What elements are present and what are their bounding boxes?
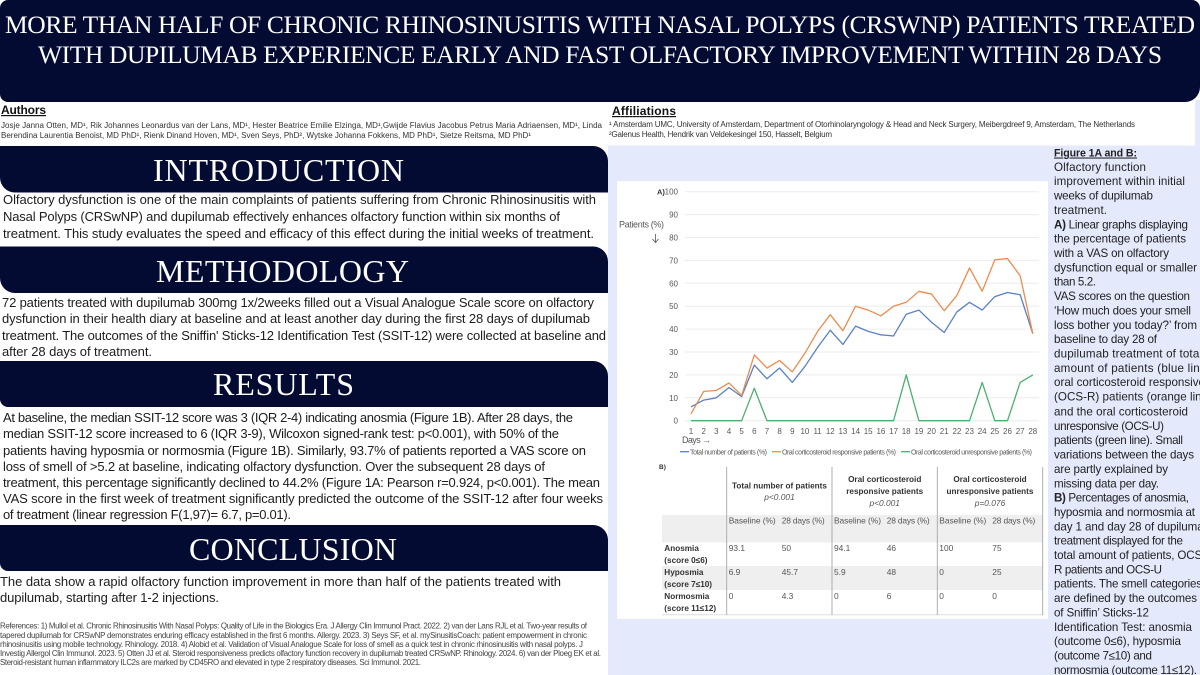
table column headers: responsive patients: [846, 487, 924, 496]
figure caption: and the oral corticosteroid: [1054, 406, 1188, 418]
table row: normosmia: Normosmia: [664, 592, 710, 601]
line chart: figure 1A: [619, 188, 1039, 456]
text: conclusion body: [0, 574, 561, 605]
table column headers: p<0.001: [763, 492, 795, 502]
figure caption: patients (green line). Small: [1054, 434, 1183, 447]
table column headers: [732, 475, 1034, 508]
panel: introduction: [0, 146, 608, 241]
text: methodology body: 72 patients treated with dupilumab 300mg 1x/2weeks filled out a Visual Analogue Scale score on olfactory: [2, 295, 594, 310]
figure caption: improvement within initial: [1054, 175, 1185, 188]
text: results body: treatment, this percentage significantly declined to 44.2% (Figure 1A: Pearson r=0.924, p<0.001). The mean: [3, 475, 600, 490]
x axis labels: 17: [889, 427, 899, 436]
title banner: MORE THAN HALF OF CHRONIC RHINOSINUSITIS WITH NASAL POLYPS (CRSWNP) PATIENTS TREATED: [5, 10, 1195, 39]
references: Investig Allergol Clin Immunol. 2023. 5) Otten JJ et al. Steroid responsiveness predicts olfactory function recovery in dupilumab treated CRSwNP. Rhinology. 2024. 6) van der Ploeg EK et al.: [0, 649, 601, 658]
text: introduction body: treatment. This study evaluates the speed and efficacy of this effect during the initial weeks of treatment.: [3, 226, 594, 241]
table sub headers: 28 days (%): [992, 516, 1036, 526]
authors: Berendina Laurentia Benoist, MD PhD¹, Rienk Dinand Hoven, MD¹, Sven Seys, PhD², Wytske Johanna Fokkens, MD PhD¹, Sietze Reitsma, MD PhD¹: [1, 131, 531, 140]
heading: introduction: [0, 146, 608, 192]
heading: methodology: [0, 246, 608, 293]
table row: hyposmia: [664, 567, 1002, 589]
text: introduction body: [3, 192, 596, 241]
figure caption: hyposmia and normosmia at: [1054, 506, 1196, 519]
table sub headers: Baseline (%): [729, 516, 776, 526]
table row: hyposmia: 0: [939, 567, 944, 577]
table label B: B): [659, 464, 666, 471]
x axis labels: 24: [978, 427, 987, 436]
table sub headers: Baseline (%): [834, 516, 881, 526]
figure caption: variations between the days: [1054, 449, 1194, 462]
gridlines and y axis: 10: [669, 394, 679, 403]
references: rhinosinusitis using mobile technology. Rhinology. 2018. 4) Alobid et al. Validation of Visual Analogue Scale for loss of smell as a quick test in chronic rhinosinusitis with nasal polyps. J: [0, 640, 583, 649]
gridlines and y axis: 60: [669, 279, 679, 288]
text: results body: [3, 410, 604, 522]
figure caption: [1053, 148, 1200, 675]
text: results body: At baseline, the median SSIT-12 score was 3 (IQR 2-4) indicating anosmia (Figure 1B). After 28 days, the: [3, 410, 573, 425]
gridlines and y axis: 80: [669, 234, 679, 242]
legend: Oral corticosteroid unresponsive patients (%): [911, 449, 1032, 456]
figure caption: unresponsive (OCS-U): [1054, 420, 1164, 433]
x axis labels: 27: [1016, 427, 1025, 436]
x axis labels: 26: [1003, 427, 1012, 436]
figure caption: are partly explained by: [1054, 463, 1168, 476]
y axis title: Patients (%): [619, 220, 664, 230]
title banner: [0, 0, 1200, 102]
legend: Total number of patients (%): [690, 449, 767, 456]
table column headers: Oral corticosteroid: [953, 475, 1027, 484]
table row: normosmia: 0: [939, 591, 944, 601]
text: results body: of treatment (linear regression F(1,97)= 6.7, p=0.01).: [3, 507, 291, 522]
figure caption: (outcome 0≤6), hyposmia: [1054, 635, 1182, 648]
references: Steroid-resistant human inflammatory ILC2s are marked by CD45RO and elevated in type 2 respiratory diseases. Sci Immunol. 2021.: [0, 658, 421, 667]
x axis labels: 1: [689, 427, 694, 436]
text: results body: median SSIT-12 score increased to 6 (IQR 3-9), Wilcoxon signed-rank test: p<0.001), with 50% of the: [3, 426, 559, 441]
panel: figure white card: [617, 181, 1048, 619]
table sub headers: [729, 516, 1036, 526]
affiliations: ¹ Amsterdam UMC, University of Amsterdam, Department of Otorhinolaryngology & Head and Neck Surgery, Meibergdreef 9, Amsterdam, The Netherlands: [609, 120, 1135, 129]
text: results body: VAS score in the first week of treatment significantly predicted the outcome of the SSIT-12 after four weeks: [3, 491, 604, 506]
heading: results: RESULTS: [213, 366, 354, 402]
figure caption: (outcome 7≤10) and: [1054, 650, 1152, 662]
x axis labels: 4: [727, 427, 732, 436]
table row: hyposmia: 45.7: [782, 567, 798, 577]
x axis labels: 9: [790, 427, 795, 436]
x axis labels: 6: [752, 427, 757, 436]
x axis labels: 5: [739, 427, 744, 436]
figure caption: patients. The smell categories: [1054, 578, 1200, 591]
table row: anosmia: 50: [782, 543, 791, 553]
figure caption: missing data per day.: [1054, 477, 1159, 490]
table row: normosmia: 4.3: [782, 591, 794, 601]
heading: conclusion: CONCLUSION: [189, 531, 397, 567]
x axis labels: 14: [851, 427, 861, 436]
table row: anosmia: 93.1: [729, 543, 745, 553]
figure caption: of Sniffin’ Sticks-12: [1054, 606, 1149, 619]
text: introduction body: Nasal Polyps (CRSwNP) and dupilumab effectively enhances olfactory function within six months of: [3, 209, 560, 224]
x axis labels: 11: [813, 427, 822, 436]
gridlines and y axis: 30: [669, 348, 679, 357]
heading: introduction: INTRODUCTION: [153, 152, 404, 188]
table column headers: Total number of patients: [732, 482, 827, 490]
line: oral corticosteroid unresponsive patients: [691, 375, 1033, 421]
figure caption: Identification Test: anosmia: [1054, 621, 1193, 634]
text: methodology body: [2, 295, 606, 359]
x axis labels: 12: [826, 427, 835, 436]
legend: Oral corticosteroid responsive patients (%): [782, 449, 896, 456]
heading: conclusion: [0, 525, 608, 571]
table row: anosmia: 100: [939, 543, 954, 553]
table row: hyposmia: (score 7≤10): [664, 580, 712, 589]
x axis labels: 8: [777, 427, 782, 436]
figure caption: A) Linear graphs displaying: [1054, 218, 1188, 231]
figure caption: treatment.: [1054, 204, 1107, 217]
title banner: WITH DUPILUMAB EXPERIENCE EARLY AND FAST OLFACTORY IMPROVEMENT WITHIN 28 DAYS: [38, 40, 1162, 69]
table row: hyposmia: 48: [887, 567, 896, 577]
panel: figure background: [608, 146, 1200, 675]
figure caption: R patients and OCS-U: [1054, 563, 1162, 576]
references: References: 1) Mullol et al. Chronic Rhinosinusitis With Nasal Polyps: Quality of Life in the Biologics Era. J Allergy Clin Immunol Pract. 2022. 2) van der Lans RJL et al. Two-year results of: [0, 622, 588, 630]
text: introduction body: Olfactory dysfunction is one of the main complaints of patients suffering from Chronic Rhinosinusitis with: [3, 192, 596, 207]
line: oral corticosteroid responsive patients: [691, 259, 1033, 414]
figure caption: baseline to day 28 of: [1054, 333, 1158, 346]
gridlines and y axis: 90: [669, 211, 679, 220]
table row: normosmia: 0: [992, 591, 997, 601]
gridlines and y axis: 100: [665, 188, 679, 197]
table column headers: p=0.076: [974, 498, 1006, 508]
table row: normosmia: 6: [887, 591, 892, 601]
authors: Josje Janna Otten, MD¹, Rik Johannes Leonardus van der Lans, MD¹, Hester Beatrice Emilie Elzinga, MD¹,Gwijde Flavius Jacobus Petrus Maria Adriaensen, MD¹, Linda: [1, 121, 603, 130]
affiliations: Affiliations: [612, 104, 676, 118]
panel: conclusion: [0, 525, 608, 605]
legend: [680, 449, 1032, 456]
table sub headers: 28 days (%): [782, 516, 825, 526]
affiliations: ²Galenus Health, Hendrik van Veldekesingel 150, Hasselt, Belgium: [609, 130, 832, 139]
gridlines and y axis: [665, 188, 1039, 426]
x axis labels: 28: [1028, 427, 1038, 436]
table row: hyposmia: 25: [992, 567, 1002, 577]
gridlines and y axis: 0: [674, 417, 679, 426]
gridlines and y axis: 40: [669, 325, 679, 334]
figure caption: loss bother you today?’ from: [1054, 319, 1197, 332]
x axis labels: 23: [965, 427, 974, 436]
x axis title: Days →: [682, 435, 711, 445]
table row: hyposmia: Hyposmia: [664, 568, 704, 577]
panel: methodology: [0, 246, 608, 359]
x axis labels: 16: [876, 427, 886, 436]
authors: [1, 103, 603, 140]
table sub headers: 28 days (%): [887, 516, 930, 526]
x axis labels: 13: [838, 427, 848, 436]
table row: anosmia: [664, 543, 1002, 565]
x axis labels: 18: [902, 427, 911, 436]
table row: anosmia: 75: [992, 543, 1002, 553]
x axis labels: 25: [990, 427, 1000, 436]
table column headers: Oral corticosteroid: [848, 475, 921, 484]
table sub headers: Baseline (%): [939, 516, 987, 526]
x axis labels: 3: [714, 427, 719, 436]
table column headers: unresponsive patients: [947, 487, 1034, 496]
table row: anosmia: 46: [887, 543, 896, 553]
text: methodology body: treatment. The outcomes of the Sniffin' Sticks-12 Identification Test (SSIT-12) were collected at baseline and: [2, 328, 606, 343]
figure caption: B) Percentages of anosmia,: [1054, 492, 1189, 505]
figure caption: with a VAS on olfactory: [1053, 247, 1169, 260]
text: conclusion body: dupilumab, starting after 1-2 injections.: [0, 590, 219, 605]
x axis labels: 20: [927, 427, 936, 436]
table row: normosmia: (score 11≤12): [664, 604, 716, 613]
x axis labels: 19: [914, 427, 924, 436]
figure caption: Olfactory function: [1054, 161, 1146, 174]
table column headers: p<0.001: [868, 498, 900, 508]
figure caption: are defined by the outcomes: [1054, 592, 1197, 605]
figure caption: VAS scores on the question: [1054, 290, 1190, 303]
x axis labels: 15: [864, 427, 873, 436]
panel: results: [0, 361, 608, 522]
figure caption: Figure 1A and B:: [1054, 148, 1137, 160]
heading: results: [0, 361, 608, 407]
x axis labels: 21: [940, 427, 949, 436]
table row: anosmia: (score 0≤6): [664, 556, 708, 565]
text: methodology body: dysfunction in their health diary at baseline and at least another day during the first 28 days of dupilumab: [2, 311, 590, 326]
figure caption: than 5.2.: [1054, 276, 1096, 289]
figure caption: weeks of dupilumab: [1053, 190, 1153, 202]
gridlines and y axis: 50: [669, 302, 679, 311]
figure caption: dupilumab treatment of total: [1054, 348, 1200, 360]
authors: Authors: [1, 103, 46, 117]
figure caption: treatment displayed for the: [1054, 535, 1183, 548]
table row: anosmia: Anosmia: [664, 544, 699, 553]
heading: methodology: METHODOLOGY: [156, 253, 409, 289]
table row: normosmia: 0: [834, 591, 839, 601]
references: tapered dupilumab for CRSwNP demonstrates enduring efficacy established in the first 6 months. Allergy. 2023. 3) Seys SF, et al. mySinusitisCoach: patient empowerment in chronic: [0, 631, 587, 640]
text: conclusion body: The data show a rapid olfactory function improvement in more than half of the patients treated with: [0, 574, 561, 589]
x axis labels: 7: [765, 427, 770, 436]
line: total patients: [691, 292, 1033, 407]
table: figure 1B: [659, 464, 1043, 615]
references: [0, 622, 601, 667]
table shading and rules: [662, 467, 1043, 615]
figure caption: dysfunction equal or smaller: [1054, 261, 1197, 274]
table row: normosmia: 0: [729, 591, 734, 601]
gridlines and y axis: 70: [669, 256, 679, 265]
chart label A: A): [657, 188, 665, 197]
text: results body: loss of smell of >5.2 at baseline, indicating olfactory dysfunction. Over the subsequent 28 days of: [3, 459, 545, 474]
table row: anosmia: 94.1: [834, 543, 851, 553]
arrow: y axis down: [652, 234, 658, 242]
text: methodology body: after 28 days of treatment.: [2, 344, 152, 359]
text: results body: patients having hyposmia or normosmia (Figure 1B). Similarly, 93.7% of patients reported a VAS score on: [3, 443, 586, 458]
figure caption: ‘How much does your smell: [1054, 304, 1191, 317]
x axis labels: [689, 427, 1038, 436]
x axis labels: 2: [701, 427, 706, 436]
table row: hyposmia: 6.9: [729, 567, 741, 577]
table row: normosmia: [664, 591, 997, 613]
gridlines and y axis: 20: [669, 371, 679, 380]
table row: hyposmia: 5.9: [834, 567, 846, 577]
data lines: [691, 259, 1033, 421]
x axis labels: 10: [800, 427, 810, 436]
affiliations: [609, 104, 1135, 139]
figure caption: the percentage of patients: [1054, 233, 1186, 246]
x axis labels: 22: [952, 427, 962, 436]
